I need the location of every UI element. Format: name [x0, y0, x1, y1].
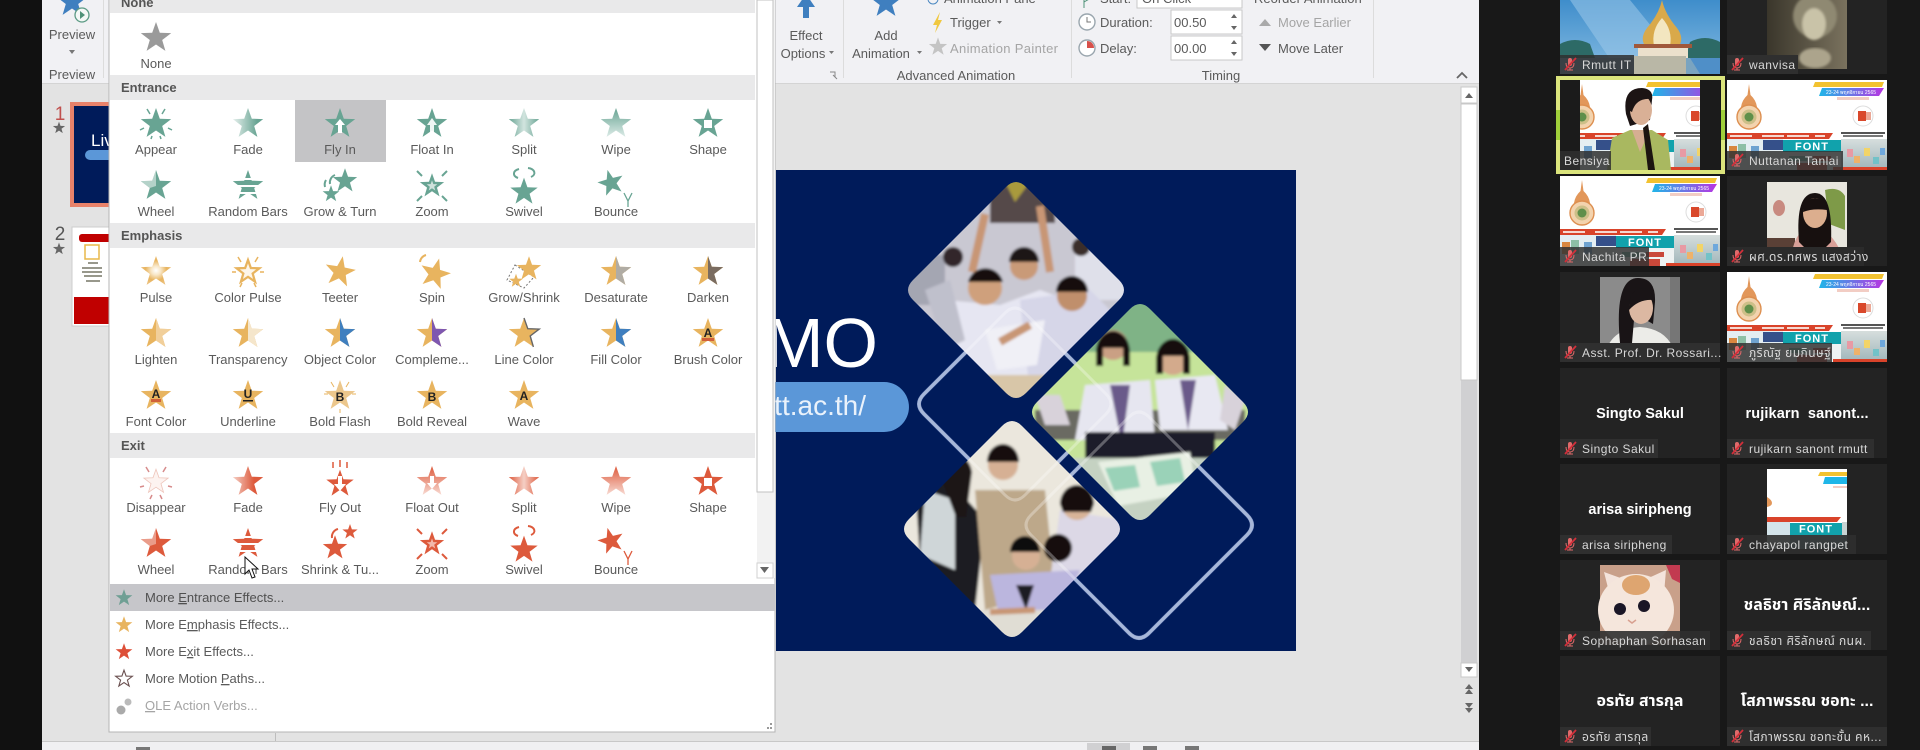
tile: อรทัย สารกุล: อรทัย สารกุล: [1597, 693, 1683, 710]
effect: Swivel: [505, 168, 543, 219]
effect: Fly In: [324, 108, 356, 157]
tile: ภูริณัฐ ยมกินษฐ์: FONT: [1795, 333, 1829, 345]
heading: Entrance: Entrance: [121, 80, 177, 95]
effect: Color Pulse: [214, 257, 282, 305]
effect: Swivel exit: Swivel: [505, 562, 543, 577]
tile: Sophaphan Sorhasan: [1560, 560, 1720, 650]
effect: Fade: [233, 108, 263, 157]
effect: Spin: [417, 255, 454, 305]
left black margin: [0, 0, 42, 750]
effect: Shrink and Turn: [301, 524, 379, 577]
effect: Object Color: Object Color: [304, 352, 377, 367]
name label: ภูริณัฐ ยมกินษฐ์: [1749, 346, 1831, 360]
effect: Random Bars exit: [208, 528, 288, 577]
name label: Singto Sakul: [1582, 442, 1655, 456]
effect: Darken: [687, 256, 729, 305]
menu: More Motion Paths: More Motion Paths...: [145, 671, 265, 686]
resize grip: [767, 723, 772, 729]
effect: None: None: [140, 56, 172, 71]
effect: Fly Out: [319, 460, 361, 515]
timing controls: 00.50: [1174, 15, 1207, 30]
tile: Nachita PR: FONT: [1628, 237, 1662, 249]
effect: Wipe: Wipe: [601, 142, 631, 157]
effect: Bounce exit: Bounce: [594, 562, 638, 577]
name label: [1727, 727, 1887, 746]
effect: Fly Out: Fly Out: [319, 500, 361, 515]
name label: [1560, 151, 1611, 170]
effect: Shape exit: Shape: [689, 500, 727, 515]
effect: Line Color: [494, 318, 554, 367]
powerpoint window background: [42, 0, 1479, 750]
effect: Complementary: Compleme...: [395, 352, 469, 367]
name label: [1727, 55, 1798, 74]
photo diamond: pupils reading: [1032, 304, 1248, 520]
timing controls: Timing: [1202, 68, 1240, 83]
menu: More Exit Effects: More Exit Effects...: [145, 644, 254, 659]
tile: Nachita PR: [1560, 176, 1720, 266]
preview button: Preview: [49, 67, 96, 82]
name label: wanvisa: [1748, 58, 1796, 72]
effect: Wipe: [601, 108, 631, 157]
name label: [1560, 439, 1658, 458]
effect: Desaturate: [584, 256, 648, 305]
effect: Bold Flash: Bold Flash: [309, 414, 371, 429]
name label: Nachita PR: [1582, 250, 1647, 264]
reorder animation commands: Move Earlier: [1278, 15, 1352, 30]
name label: อรทัย สารกุล: [1582, 730, 1649, 744]
effect: Bold Flash: B: [336, 390, 345, 404]
selected effect highlight: [295, 100, 386, 162]
preview button: [49, 0, 96, 82]
tile: chayapol rangpet: FONT: [1799, 524, 1833, 536]
heading: Exit: [110, 433, 755, 458]
photo diamond: pupils raising hands: [908, 182, 1124, 398]
effect: Bold Flash: [309, 380, 371, 429]
tile: Nuttanan Tanlai: [1727, 80, 1887, 170]
name label: [1727, 439, 1874, 458]
name label: [1727, 151, 1843, 170]
effect: Bounce: [594, 167, 638, 219]
tile: Rmutt IT: [1560, 0, 1720, 74]
panel: zoom participant gallery: [1556, 0, 1887, 746]
heading: Emphasis: Emphasis: [121, 228, 182, 243]
effect: Transparency: [208, 318, 288, 367]
name label: [1560, 631, 1710, 650]
tile: โสภาพรรณ ชอทะชั้น: [1727, 656, 1887, 746]
effect: Line Color: Line Color: [494, 352, 554, 367]
effect options button: Effect: [789, 28, 823, 43]
add animation button: Add: [874, 28, 898, 43]
name label: arisa siripheng: [1582, 538, 1667, 552]
menu: More Entrance Effects highlighted: [110, 584, 775, 611]
advanced animation commands: Advanced Animation: [897, 68, 1015, 83]
effect: Darken: Darken: [687, 290, 729, 305]
heading: Entrance: [110, 75, 755, 100]
outline diamonds: [919, 308, 1252, 638]
effect: Float In: [410, 108, 454, 157]
faint outline overlay: [919, 308, 1252, 638]
effect: Shrink and Turn: Shrink & Tu...: [301, 562, 379, 577]
effect: Grow and Turn: [304, 168, 376, 219]
tile: Nuttanan Tanlai: 23-24 พฤศจิกายน 2565: [1826, 90, 1876, 96]
effect: Pulse: [140, 256, 172, 305]
name label: [1727, 247, 1869, 266]
effect: Wheel exit: Wheel: [138, 562, 175, 577]
gallery scrollbar: [757, 0, 775, 578]
effect: Appear: [135, 108, 178, 157]
name label: [1560, 247, 1649, 266]
tile: ชลธิชา ศิริลักษณ์: [1727, 560, 1887, 650]
effect: Disappear: Disappear: [126, 500, 186, 515]
effect: Underline: Underline: [220, 414, 276, 429]
woman speaker: [1607, 88, 1671, 170]
slide thumbnail 2: [53, 224, 115, 326]
name label: [1727, 631, 1871, 650]
effect: Shape: Shape: [689, 142, 727, 157]
effect: Fade exit: Fade: [233, 500, 263, 515]
ribbon: [42, 0, 1479, 84]
advanced animation commands: Animation Painter: [950, 41, 1059, 56]
effect: Wipe exit: Wipe: [601, 500, 631, 515]
tile: Singto Sakul: Singto Sakul: [1596, 406, 1684, 422]
add animation button: [852, 0, 922, 61]
name label: [1727, 535, 1856, 554]
effect: Pulse: Pulse: [140, 290, 172, 305]
effect: Wheel exit: [138, 528, 175, 577]
tile: Asst. Prof. Dr. Rossarin: [1560, 272, 1722, 362]
main slide: [740, 170, 1296, 651]
effect: Underline: U: [244, 387, 252, 401]
effect: Wave: [508, 380, 540, 429]
editor vertical scrollbar: [1461, 84, 1478, 713]
slide thumbnail 1: Liv: [91, 131, 113, 150]
photo diamond: teacher with pupils: [904, 421, 1120, 637]
effect: Color Pulse: Color Pulse: [214, 290, 282, 305]
effect: Teeter: [322, 254, 359, 305]
effect: Brush Color: A: [704, 326, 713, 340]
effect: Lighten: [135, 318, 177, 367]
name label: chayapol rangpet: [1749, 538, 1848, 552]
menu: More Emphasis Effects: More Emphasis Effects...: [145, 617, 289, 632]
timing controls: Duration:: [1100, 15, 1153, 30]
name label: Asst. Prof. Dr. Rossari...: [1582, 346, 1722, 360]
name label: โสภาพรรณ ชอทะชั้น คห...: [1749, 729, 1882, 744]
effect: Bounce: Bounce: [594, 204, 638, 219]
tile: arisa siripheng: arisa siripheng: [1588, 502, 1692, 518]
effect: Float In: Float In: [410, 142, 454, 157]
effect: Disappear: [126, 467, 186, 515]
effect: Bounce exit: [594, 525, 638, 577]
tile: โสภาพรรณ ชอทะชั้น: โสภาพรรณ ชอทะ ...: [1741, 693, 1873, 710]
effect: Object Color: [304, 318, 377, 367]
effect: Swivel: Swivel: [505, 204, 543, 219]
effect: Fill Color: Fill Color: [590, 352, 642, 367]
effect: Shape exit: [689, 466, 727, 515]
tile: Nachita PR: 23-24 พฤศจิกายน 2565: [1659, 186, 1709, 192]
name label: [1560, 727, 1651, 746]
effect: None: [140, 22, 172, 71]
name label: Nuttanan Tanlai: [1749, 154, 1839, 168]
slide heading fragment: MO: [765, 304, 878, 382]
effect: Fade exit: [233, 466, 263, 515]
tile: ภูริณัฐ ยมกินษฐ์: 23-24 พฤศจิกายน 2565: [1826, 282, 1876, 288]
url pill: [740, 382, 909, 432]
effect: Zoom exit: Zoom: [415, 562, 449, 577]
effect: Random Bars: Random Bars: [208, 204, 288, 219]
effect: Bold Reveal: [397, 380, 467, 429]
effect: Transparency: Transparency: [208, 352, 288, 367]
name label: [1560, 535, 1672, 554]
effect: Fade: Fade: [233, 142, 263, 157]
slide thumbnail 2: 2: [55, 224, 65, 245]
collapse ribbon caret: [1457, 73, 1467, 78]
effect: Bold Reveal: Bold Reveal: [397, 414, 467, 429]
effect: Brush Color: Brush Color: [674, 352, 743, 367]
reorder animation commands: Move Later: [1278, 41, 1344, 56]
effect: Fill Color: [590, 318, 642, 367]
effect: Spin: Spin: [419, 290, 445, 305]
name label: ผศ.ดร.ทศพร แสงสว่าง: [1749, 250, 1869, 264]
effect: Grow Shrink: [488, 256, 560, 305]
tile: ภูริณัฐ ยมกินษฐ์: [1727, 272, 1887, 362]
effect options button: [781, 0, 837, 79]
tile: Nuttanan Tanlai: FONT: [1795, 141, 1829, 153]
effect: Fly In: Fly In: [324, 142, 356, 157]
effect: Desaturate: Desaturate: [584, 290, 648, 305]
effect: Font Color: Font Color: [126, 414, 187, 429]
tile: Singto Sakul: [1560, 368, 1720, 458]
effect: Complementary: [395, 318, 469, 367]
timing controls: Delay:: [1100, 41, 1137, 56]
effect: Brush Color: [674, 318, 743, 367]
effect: Shape: [689, 108, 727, 157]
advanced animation commands: [897, 0, 1059, 83]
name label: [1727, 343, 1832, 362]
effect: Lighten: Lighten: [135, 352, 177, 367]
url pill: tt.ac.th/: [774, 390, 866, 421]
tile: rujikarn sanont rmutt: rujikarn sanont...: [1746, 406, 1868, 422]
tile: arisa siripheng: [1560, 464, 1720, 554]
effect: Wipe exit: [601, 466, 631, 515]
heading: Emphasis: [110, 223, 755, 248]
effect: Wave: A: [520, 389, 529, 403]
effect options button: Options: [781, 46, 826, 61]
name label: Sophaphan Sorhasan: [1582, 634, 1706, 648]
add animation button: Animation: [852, 46, 910, 61]
tile: อรทัย สารกุล: [1560, 656, 1720, 746]
effect: Split exit: Split: [511, 500, 537, 515]
effect: Split exit: [509, 466, 539, 515]
name label: rujikarn sanont rmutt: [1749, 442, 1868, 456]
effect: Underline: [220, 380, 276, 429]
panel: animation gallery dropdown: [109, 0, 775, 732]
effect: Bold Reveal: B: [428, 390, 437, 404]
name label: Rmutt IT: [1582, 58, 1632, 72]
preview button: Preview: [49, 27, 96, 42]
timing controls: 00.00: [1174, 41, 1207, 56]
effect: Teeter: Teeter: [322, 290, 359, 305]
reorder animation commands: [1254, 0, 1362, 56]
effect: Font Color: A: [152, 387, 161, 401]
advanced animation commands: Trigger: [950, 15, 991, 30]
menu: OLE Action Verbs: OLE Action Verbs...: [145, 698, 258, 713]
name label: [1560, 343, 1722, 362]
effect: Zoom: Zoom: [415, 204, 449, 219]
effect: Font Color: [126, 380, 187, 429]
heading: None: [110, 0, 755, 13]
tile: wanvisa: [1727, 0, 1887, 74]
effect: Wheel: Wheel: [138, 204, 175, 219]
effect: Wave: Wave: [508, 414, 540, 429]
timing controls: [1079, 0, 1242, 83]
tile: chayapol rangpet: [1727, 464, 1887, 554]
effect: Float Out: Float Out: [405, 500, 459, 515]
slide thumbnail 1: 1: [55, 104, 65, 125]
name label: ชลธิชา ศิริลักษณ์ กนผ.: [1749, 634, 1866, 648]
effect: Wheel: [138, 170, 175, 219]
icon: mouse cursor: [245, 557, 258, 578]
tile: rujikarn sanont rmutt: [1727, 368, 1887, 458]
effect: Split: [509, 108, 539, 157]
tile: ชลธิชา ศิริลักษณ์: ชลธิชา ศิริลักษณ์...: [1744, 597, 1870, 614]
effect: Split: Split: [511, 142, 537, 157]
effect: Swivel exit: [505, 526, 543, 577]
tile: Bensiya active speaker: [1558, 78, 1723, 172]
name label: [1560, 55, 1634, 74]
effect: Zoom exit: [415, 529, 449, 577]
menu: More Entrance Effects highlighted: More Entrance Effects...: [145, 590, 284, 605]
effect: Appear: Appear: [135, 142, 178, 157]
name label: Bensiya: [1564, 154, 1610, 168]
heading: Exit: Exit: [121, 438, 146, 453]
tile: ผศ.ดร.ทศพร แสงสว่าง: [1727, 176, 1887, 266]
effect: Random Bars exit: Random Bars: [208, 562, 288, 577]
slide thumbnail 1: [53, 102, 115, 207]
effect: Float Out: [405, 466, 459, 515]
effect: Grow and Turn: Grow & Turn: [304, 204, 376, 219]
effect: Random Bars: [208, 170, 288, 219]
effect: Zoom: [415, 171, 449, 219]
status bar: [42, 733, 1479, 750]
effect: Grow Shrink: Grow/Shrink: [488, 290, 560, 305]
